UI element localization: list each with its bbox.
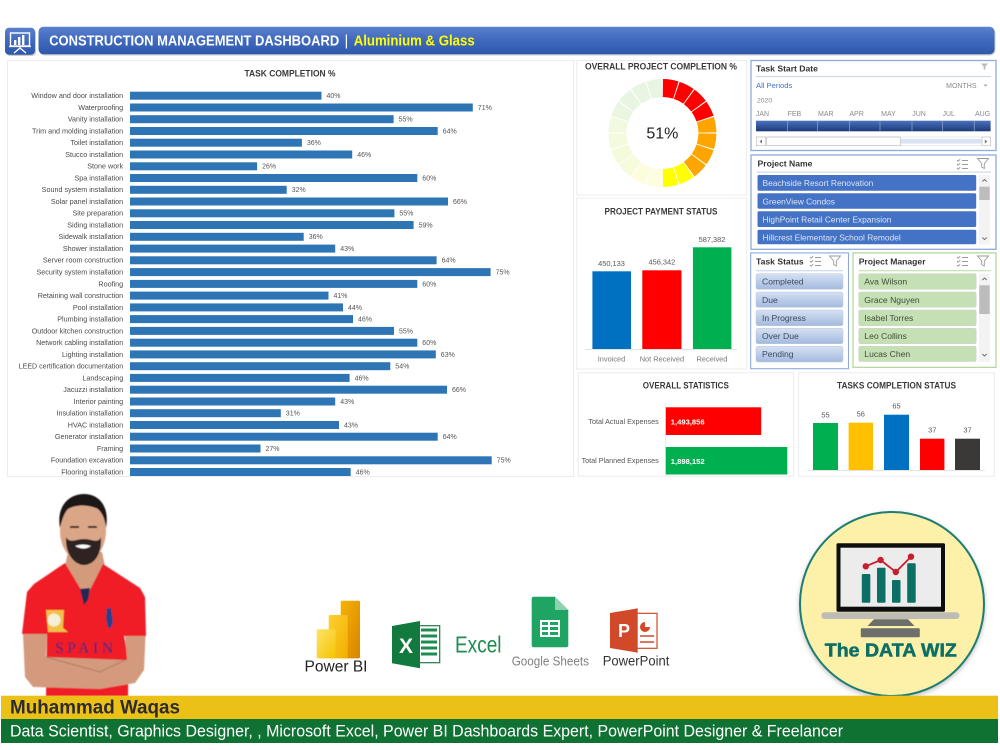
payment bars: 450,133 xyxy=(598,259,625,268)
slicer heading: Project Manager xyxy=(859,257,926,267)
scrollbar xyxy=(979,175,990,244)
row: Security system installation: Security system installation xyxy=(37,268,123,276)
row: Vanity installation: Vanity installation xyxy=(68,115,123,124)
row: HVAC installation: HVAC installation xyxy=(68,420,123,429)
row: Server room construction: Server room construction xyxy=(43,256,123,265)
icon: PowerPoint: P xyxy=(618,621,630,641)
month labels: AUG xyxy=(975,111,990,118)
row: Pool installation xyxy=(73,303,362,312)
logos row xyxy=(304,597,670,676)
row: Interior painting xyxy=(74,397,354,406)
row: Pool installation: 44% xyxy=(348,305,362,312)
neck xyxy=(65,552,105,598)
row: Sidewalk installation xyxy=(58,232,323,241)
row: Roofing: Roofing xyxy=(98,279,123,288)
row: Window and door installation: 40% xyxy=(326,93,341,100)
crest xyxy=(46,610,68,632)
row: Security system installation: 75% xyxy=(496,270,510,276)
panel: task start date timeline xyxy=(751,60,996,150)
period selector: 2020 xyxy=(757,98,772,104)
payment bars: 587,382 xyxy=(699,235,725,244)
name banner: Muhammad Waqas xyxy=(10,696,180,718)
row: Network cabling installation xyxy=(36,338,436,347)
row: Siding installation: Siding installation xyxy=(67,220,123,229)
badge circle xyxy=(800,512,984,696)
month labels: JUN xyxy=(912,111,926,118)
panel: project payment status xyxy=(577,198,747,369)
row: Spa installation: Spa installation xyxy=(74,173,123,182)
name banner xyxy=(1,696,998,719)
row: Toilet installation xyxy=(70,138,321,147)
icon: Excel: Excel xyxy=(455,632,502,658)
payment bars: 456,342 xyxy=(649,257,675,266)
project items: HighPoint Retail Center Expansion xyxy=(762,214,892,224)
project items xyxy=(758,175,976,244)
panel heading: TASKS COMPLETION STATUS xyxy=(837,381,956,392)
smile xyxy=(75,544,91,548)
row: Sound system installation xyxy=(42,185,306,194)
row: Generator installation: 64% xyxy=(443,434,457,441)
row: Shower installation: Shower installation xyxy=(63,244,123,253)
row: LEED certification documentation: 54% xyxy=(395,364,409,371)
row: Sound system installation: Sound system installation xyxy=(42,185,123,194)
row: Framing xyxy=(97,444,280,453)
role banner xyxy=(1,719,998,743)
status items: Completed xyxy=(762,276,804,286)
hair xyxy=(59,494,107,528)
row: Site preparation: 55% xyxy=(399,211,413,218)
row: Trim and molding installation: Trim and molding installation xyxy=(32,126,123,135)
row: Roofing: 60% xyxy=(422,281,436,288)
row: Waterproofing: Waterproofing xyxy=(78,103,123,112)
placket xyxy=(80,588,90,605)
row: Trim and molding installation: 64% xyxy=(443,128,457,135)
payment bars: Received xyxy=(697,354,727,363)
row: Sidewalk installation: 36% xyxy=(309,234,323,241)
row: Outdoor kitchen construction: Outdoor kitchen construction xyxy=(32,326,123,335)
row: Jacuzzi installation: Jacuzzi installation xyxy=(63,385,123,394)
row: Plumbing installation xyxy=(57,314,372,324)
row: Flooring installation xyxy=(61,467,370,476)
slicer heading: Project Name xyxy=(758,158,813,168)
scrollbar xyxy=(979,274,990,362)
row: Plumbing installation: 46% xyxy=(358,316,372,324)
row: LEED certification documentation xyxy=(19,362,409,371)
eyes xyxy=(70,526,97,528)
panel: project name slicer xyxy=(751,155,996,249)
row: Solar panel installation: 66% xyxy=(453,199,467,206)
row: Toilet installation: 36% xyxy=(307,140,321,147)
timeline heading: Task Start Date xyxy=(756,63,818,73)
row: Lighting installation: 63% xyxy=(441,352,455,359)
manager items: Lucas Chen xyxy=(864,349,910,359)
portrait: man in red polo xyxy=(22,494,146,696)
status bars: 37 xyxy=(928,426,936,435)
period selector: MONTHS xyxy=(946,83,977,90)
row: Lighting installation xyxy=(62,350,455,359)
payment bars xyxy=(585,235,737,363)
row: Waterproofing: 71% xyxy=(478,105,492,112)
row: Shower installation xyxy=(63,244,354,253)
manager items: Leo Collins xyxy=(864,331,907,341)
icon: Excel xyxy=(392,621,502,668)
status bars: 55 xyxy=(821,410,830,420)
row: Roofing xyxy=(98,279,436,288)
icon: Power BI xyxy=(304,601,368,676)
month labels: FEB xyxy=(788,111,802,118)
status items xyxy=(756,274,843,362)
row: Sidewalk installation: Sidewalk installation xyxy=(58,232,123,241)
panel heading: PROJECT PAYMENT STATUS xyxy=(604,206,718,218)
month labels xyxy=(756,111,990,118)
project items: Beachside Resort Renovation xyxy=(762,178,874,188)
header title bar: Aluminium & Glass xyxy=(354,34,475,50)
row: Flooring installation: Flooring installation xyxy=(61,467,123,476)
row: Framing: 27% xyxy=(266,446,280,453)
period selector xyxy=(756,81,988,104)
row: Foundation excavation: 75% xyxy=(497,458,511,465)
timeline band xyxy=(756,121,991,131)
row: Network cabling installation: Network cabling installation xyxy=(36,338,123,347)
chart title: TASK COMPLETION % xyxy=(244,68,336,80)
panel: overall statistics xyxy=(578,373,794,476)
row: Retaining wall construction: 41% xyxy=(334,293,348,300)
row: Spa installation xyxy=(74,173,436,182)
status bars: 65 xyxy=(892,402,901,411)
month labels: JUL xyxy=(942,111,955,118)
payment bars: Invoiced xyxy=(598,354,625,363)
expense bars xyxy=(582,403,787,476)
row: Siding installation: 59% xyxy=(419,222,433,229)
status items: Due xyxy=(762,295,778,305)
icon: Google Sheets xyxy=(512,597,589,668)
row: Landscaping: Landscaping xyxy=(82,373,123,382)
project items: GreenView Condos xyxy=(762,196,835,206)
row: Interior painting: Interior painting xyxy=(74,397,123,406)
status bars: 56 xyxy=(857,409,865,418)
month labels: MAR xyxy=(818,111,834,118)
row: Landscaping xyxy=(82,373,369,382)
row: Jacuzzi installation: 66% xyxy=(452,387,466,394)
panel heading: OVERALL STATISTICS xyxy=(643,381,729,392)
expense bars: 1,493,856 xyxy=(671,418,705,426)
row: Outdoor kitchen construction: 55% xyxy=(399,328,413,335)
icon: multi-select and clear filter xyxy=(957,158,988,169)
icon: PowerPoint xyxy=(603,608,670,669)
row: Foundation excavation: Foundation excavation xyxy=(51,456,123,465)
row: Lighting installation: Lighting installation xyxy=(62,350,123,359)
icon: Google Sheets: Google Sheets xyxy=(512,653,589,668)
row: Generator installation xyxy=(55,432,457,441)
panel: tasks completion status xyxy=(799,373,994,476)
month labels: APR xyxy=(849,111,864,118)
manager items: Isabel Torres xyxy=(864,313,913,323)
row: Landscaping: 46% xyxy=(355,375,369,382)
icon: Power BI: Power BI xyxy=(304,659,368,676)
status items: Pending xyxy=(762,349,794,359)
row: Shower installation: 43% xyxy=(340,246,354,253)
row: HVAC installation xyxy=(68,420,358,429)
row: Window and door installation xyxy=(31,91,341,100)
icon: PowerPoint: PowerPoint xyxy=(603,654,670,669)
header icon xyxy=(5,28,36,56)
panel heading: OVERALL PROJECT COMPLETION % xyxy=(585,62,737,72)
project items: Hillcrest Elementary School Remodel xyxy=(762,232,901,242)
month labels: JAN xyxy=(756,111,769,118)
row: Stucco installation: 46% xyxy=(357,152,371,159)
row: LEED certification documentation: LEED certification documentation xyxy=(19,362,123,371)
head xyxy=(60,500,106,562)
row: Vanity installation: 55% xyxy=(399,117,413,124)
status items: In Progress xyxy=(762,313,806,323)
icon: multi-select and clear filter xyxy=(810,256,840,266)
shirt text: SPAIN xyxy=(55,640,113,657)
row: Stone work: Stone work xyxy=(87,162,124,171)
row: Plumbing installation: Plumbing installation xyxy=(57,314,123,324)
status bars: 37 xyxy=(963,426,972,435)
folded arms xyxy=(23,634,146,689)
status items: Over Due xyxy=(762,331,799,341)
row: Stone work xyxy=(87,162,276,171)
icon: clear filter xyxy=(981,64,988,70)
row: Vanity installation xyxy=(68,115,413,124)
row: Server room construction xyxy=(43,256,456,265)
header title bar: | xyxy=(344,34,348,50)
row: Outdoor kitchen construction xyxy=(32,326,413,335)
panel: task status slicer xyxy=(751,253,848,369)
row: Retaining wall construction xyxy=(38,291,348,300)
gauge value: 51% xyxy=(646,126,678,142)
slicer heading: Task Status xyxy=(756,257,804,267)
timeline scrollbar xyxy=(756,137,991,146)
row: Stone work: 26% xyxy=(262,164,276,171)
panel: project manager slicer xyxy=(853,253,996,367)
monitor xyxy=(821,543,959,637)
row: Insulation installation xyxy=(56,409,300,418)
row: Waterproofing xyxy=(78,103,492,112)
row: Insulation installation: Insulation installation xyxy=(56,409,123,418)
row: Spa installation: 60% xyxy=(422,175,436,182)
expense bars: 1,898,152 xyxy=(671,457,705,466)
panel: task completion chart xyxy=(8,60,574,476)
header title bar xyxy=(38,27,996,56)
row: Interior painting: 43% xyxy=(340,399,354,406)
period selector: All Periods xyxy=(756,81,792,90)
row: Siding installation xyxy=(67,220,433,229)
payment bars: Not Received xyxy=(640,354,684,363)
row: Stucco installation xyxy=(65,150,371,159)
month labels: MAY xyxy=(881,111,896,118)
row: Framing: Framing xyxy=(97,444,123,453)
icon: Excel: X xyxy=(399,635,413,658)
row: Server room construction: 64% xyxy=(442,258,456,265)
status bars xyxy=(808,402,985,471)
polo logo xyxy=(106,608,113,628)
expense bars: Total Actual Expenses xyxy=(588,417,659,426)
row: Jacuzzi installation xyxy=(63,385,466,394)
header title bar: CONSTRUCTION MANAGEMENT DASHBOARD xyxy=(49,34,339,50)
row: Pool installation: Pool installation xyxy=(73,303,123,312)
row: Solar panel installation xyxy=(51,197,467,206)
row: Retaining wall construction: Retaining wall construction xyxy=(38,291,123,300)
row: Flooring installation: 46% xyxy=(356,469,370,476)
shirt xyxy=(22,563,146,696)
row: Stucco installation: Stucco installation xyxy=(65,150,123,159)
icon: multi-select and clear filter xyxy=(957,256,988,266)
row: Site preparation xyxy=(72,209,413,218)
row: Security system installation xyxy=(37,268,510,276)
beard xyxy=(66,537,101,565)
row: Trim and molding installation xyxy=(32,126,457,135)
manager items: Ava Wilson xyxy=(864,276,907,286)
row: HVAC installation: 43% xyxy=(344,422,358,429)
expense bars: Total Planned Expenses xyxy=(582,456,659,465)
manager items: Grace Nguyen xyxy=(864,295,920,305)
row: Foundation excavation xyxy=(51,456,511,465)
row: Solar panel installation: Solar panel installation xyxy=(51,197,123,206)
row: Sound system installation: 32% xyxy=(292,187,306,194)
row: Generator installation: Generator installation xyxy=(55,432,123,441)
row: Site preparation: Site preparation xyxy=(72,209,123,218)
role banner: Data Scientist, Graphics Designer, , Microsoft Excel, Power BI Dashboards Expert, PowerPoint Designer & Freelancer xyxy=(10,722,843,740)
donut gauge xyxy=(616,86,709,180)
row: Network cabling installation: 60% xyxy=(422,340,436,347)
manager items xyxy=(859,274,976,362)
logo: The Data Wiz xyxy=(799,512,985,699)
row: Insulation installation: 31% xyxy=(286,411,300,418)
row: Window and door installation: Window and door installation xyxy=(31,91,123,100)
row: Toilet installation: Toilet installation xyxy=(70,138,123,147)
panel: overall project completion xyxy=(577,60,747,195)
logo wordmark: The DATA WIZ xyxy=(825,641,957,661)
